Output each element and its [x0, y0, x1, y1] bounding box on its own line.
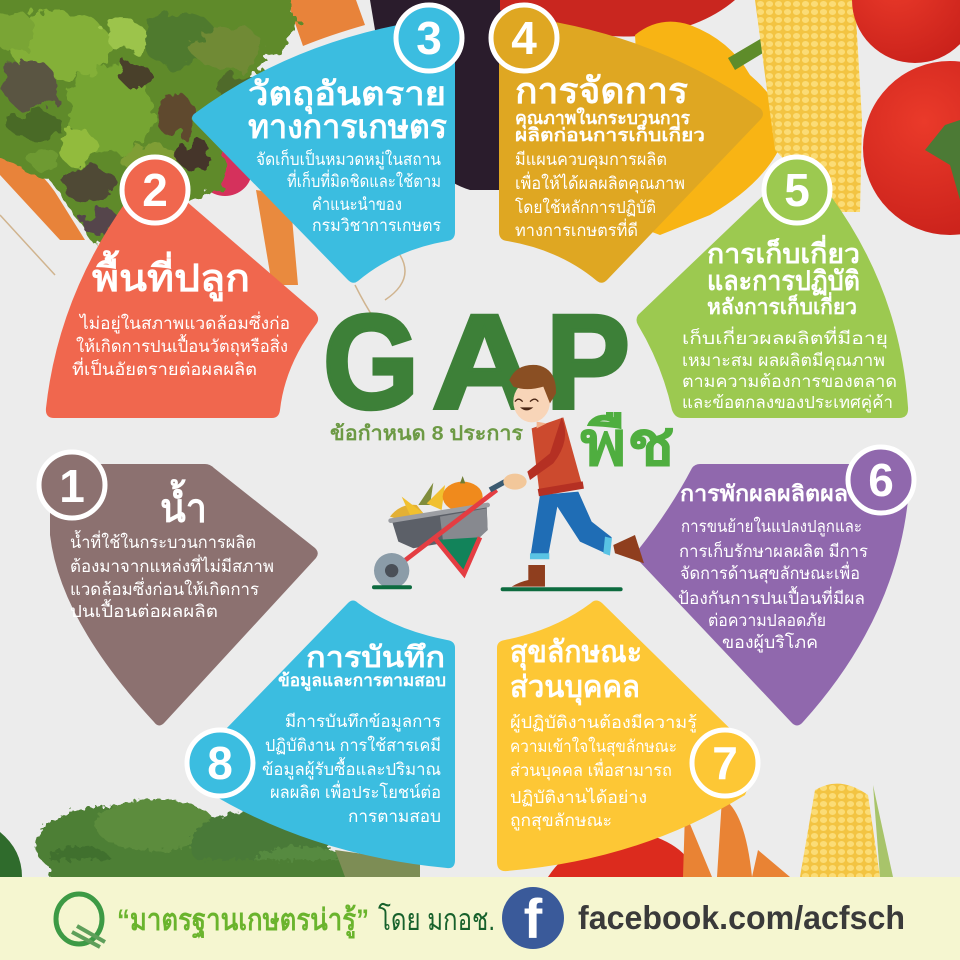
- panel 8 shape: [194, 600, 455, 868]
- number 2: [122, 157, 188, 223]
- panel 4 heading: ผลิตก่อนการเก็บเกี่ยว: [515, 122, 705, 145]
- panel 5 body: เก็บเกี่ยวผลผลิตที่มีอายุ: [682, 326, 888, 349]
- title: GAP: A: [432, 288, 537, 437]
- facebook address: facebook.com/acfsch: [578, 899, 905, 936]
- subtitle: ข้อกำหนด 8 ประการ: [330, 422, 523, 445]
- tomato top: [852, 0, 960, 63]
- radish: [198, 144, 252, 196]
- panel 1 body: น้ำที่ใช้ในกระบวนการผลิต: [70, 530, 256, 552]
- panel 1 body: ปนเปื้อนต่อผลผลิต: [70, 599, 218, 621]
- panel 3: hazardous materials: [192, 5, 462, 283]
- panel 4 heading: คุณภาพในกระบวนการ: [515, 107, 690, 130]
- panel 3 heading: ทางการเกษตร: [248, 108, 447, 145]
- panel 1 body: ต้องมาจากแหล่งที่ไม่มีสภาพ: [70, 554, 274, 576]
- panel 4 heading: การจัดการ: [515, 70, 689, 111]
- panel 3 body: ที่เก็บที่มิดชิดและใช้ตาม: [287, 169, 441, 191]
- carrot roots: [0, 215, 405, 320]
- panel 6 shape: [636, 464, 908, 726]
- cucumber: [0, 832, 22, 877]
- panel 4 shape: [499, 15, 763, 283]
- panel 7 body: ผู้ปฏิบัติงานต้องมีความรู้: [510, 713, 697, 733]
- panel 8 body: การตามสอบ: [348, 807, 441, 826]
- panel 3 body: จัดเก็บเป็นหมวดหมู่ในสถาน: [256, 148, 441, 170]
- carrots bottom: [683, 798, 790, 877]
- panel 4 body: เพื่อให้ได้ผลผลิตคุณภาพ: [515, 171, 685, 194]
- panel 6 body: การเก็บรักษาผลผลิต มีการ: [679, 540, 868, 561]
- number 8: [187, 730, 253, 796]
- panel 8 heading: [278, 642, 446, 692]
- corn leaf: [873, 785, 893, 877]
- number 8: 8: [207, 737, 233, 789]
- panel 6 body: จัดการด้านสุขลักษณะเพื่อ: [680, 561, 860, 584]
- number 1: [39, 452, 105, 518]
- produce: [390, 476, 483, 518]
- panel 5 heading: และการปฏิบัติ: [707, 266, 860, 296]
- broccoli: [35, 799, 350, 890]
- panel 3 heading: [248, 75, 447, 145]
- panel 3 heading: วัตถุอันตราย: [248, 75, 446, 115]
- panel 5 heading: หลังการเก็บเกี่ยว: [707, 291, 857, 319]
- photo: vegetables top: [0, 0, 960, 320]
- panel 8 body: มีการบันทึกข้อมูลการ: [285, 712, 441, 732]
- panel 2 body: ให้เกิดการปนเปื้อนวัตถุหรือสิ่ง: [76, 334, 288, 357]
- asparagus: [335, 850, 420, 877]
- number 7: 7: [712, 737, 738, 789]
- panel 7 body: ส่วนบุคคล เพื่อสามารถ: [510, 758, 672, 781]
- number 5: 5: [784, 164, 810, 216]
- red pepper top: [500, 0, 735, 36]
- number 2: 2: [142, 164, 168, 216]
- lettuce: [0, 0, 295, 245]
- panel 4 heading: [515, 70, 705, 145]
- panel 7 body: ถูกสุขลักษณะ: [510, 811, 612, 831]
- eggplant: [370, 0, 505, 190]
- panel 2 body: ไม่อยู่ในสภาพแวดล้อมซึ่งก่อ: [78, 311, 290, 334]
- carrot left: [0, 148, 85, 240]
- panel 4 body: [515, 150, 685, 240]
- panel 7 body: [510, 713, 697, 831]
- panel 6 body: ของผู้บริโภค: [722, 632, 818, 653]
- panel 5 body: เหมาะสม ผลผลิตมีคุณภาพ: [682, 351, 885, 371]
- footer slogan: โดย มกอช.: [378, 902, 495, 937]
- panel 6: resting produce: [636, 447, 914, 726]
- red pepper bottom: [548, 832, 696, 877]
- panel 8 heading: ข้อมูลและการตามสอบ: [278, 671, 446, 692]
- panel 7 heading: สุขลักษณะ: [510, 636, 642, 671]
- panel 1 body: [70, 530, 274, 621]
- title: GAP: P: [546, 288, 630, 437]
- panel 1 heading: น้ำ: [160, 479, 207, 531]
- title: GAP: G: [323, 288, 419, 437]
- panel 1 body: แวดล้อมซึ่งก่อนให้เกิดการ: [70, 577, 259, 599]
- panel 5 body: ตามความต้องการของตลาด: [682, 372, 897, 391]
- panel 8 heading: การบันทึก: [306, 642, 445, 674]
- panel 6 body: การขนย้ายในแปลงปลูกและ: [681, 516, 862, 537]
- icon: facebook: f: [524, 887, 543, 950]
- corn top: [755, 0, 862, 212]
- logo: [56, 894, 105, 947]
- carrot top: [287, 0, 365, 46]
- number 4: 4: [511, 12, 537, 64]
- panel 6 body: ป้องกันการปนเปื้อนที่มีผล: [678, 586, 865, 608]
- panel 5 body: [682, 326, 897, 413]
- carrot middle: [256, 190, 298, 285]
- panel 2 shape: [46, 170, 318, 418]
- pepper stem: [728, 38, 768, 70]
- panel 4 body: ทางการเกษตรที่ดี: [515, 218, 638, 240]
- panel 3 body: [256, 148, 441, 235]
- icon: facebook: [502, 887, 564, 950]
- panel 5 heading: [707, 234, 860, 319]
- title: GAP: [323, 288, 630, 437]
- number 7: [692, 730, 758, 796]
- panel 3 body: คำแนะนำของ: [312, 195, 402, 214]
- panel 7 body: ความเข้าใจในสุขลักษณะ: [510, 736, 677, 757]
- panel 8 body: ผลผลิต เพื่อประโยชน์ต่อ: [270, 780, 441, 802]
- panel 6 body: ต่อความปลอดภัย: [708, 611, 826, 630]
- panel 1 shape: [50, 464, 318, 726]
- panel 8 body: ปฏิบัติงาน การใช้สารเคมี: [265, 735, 441, 755]
- corn bottom: [800, 784, 880, 877]
- panel 2 heading: พื้นที่ปลูก: [92, 250, 250, 302]
- tomato calyx: [925, 120, 960, 200]
- tomato right: [863, 61, 960, 235]
- footer slogan: “มาตรฐานเกษตรน่ารู้”: [117, 904, 369, 940]
- panel 8 body: ข้อมูลผู้รับซื้อและปริมาณ: [262, 757, 441, 780]
- panel 5 heading: การเก็บเกี่ยว: [707, 234, 860, 269]
- panel 2: planting area: [46, 157, 318, 418]
- footer slogan: [117, 902, 495, 940]
- panel 8 body: [262, 712, 441, 826]
- panel 5: harvest: [636, 157, 908, 418]
- panel 2 body: ที่เป็นอัยตรายต่อผลผลิต: [72, 357, 257, 379]
- number 5: [764, 157, 830, 223]
- panel 3 body: กรมวิชาการเกษตร: [312, 216, 441, 235]
- farmer: [503, 365, 644, 589]
- panel 8: records: [187, 600, 455, 868]
- panel 7 heading: ส่วนบุคคล: [510, 671, 640, 706]
- title: plants: พืช: [580, 410, 675, 479]
- panel 7 shape: [497, 600, 760, 871]
- number 6: 6: [868, 454, 894, 506]
- illustration: farmer with wheelbarrow: [374, 365, 644, 589]
- panel 5 shape: [636, 165, 908, 418]
- panel 1: water: [39, 452, 318, 726]
- panel 6 body: [678, 516, 868, 653]
- panel 7 body: ปฏิบัติงานได้อย่าง: [510, 787, 647, 807]
- panel 4: quality management: [491, 5, 763, 283]
- footer bar: [0, 877, 960, 960]
- panel 3 shape: [192, 17, 455, 283]
- panel 6 heading: การพักผลผลิตผล: [680, 481, 848, 506]
- number 4: [491, 5, 557, 71]
- panel 4 body: มีแผนควบคุมการผลิต: [515, 150, 667, 170]
- panel 2 body: [72, 311, 290, 379]
- number 6: [848, 447, 914, 513]
- number 3: [396, 5, 462, 71]
- panel 7: personal hygiene: [497, 600, 760, 871]
- photo: vegetables bottom: [0, 784, 893, 890]
- yellow pepper: [620, 22, 785, 235]
- panel 5 body: และข้อตกลงของประเทศคู่ค้า: [682, 393, 893, 413]
- number 3: 3: [416, 12, 442, 64]
- panel 7 heading: [510, 636, 642, 706]
- panel 4 body: โดยใช้หลักการปฏิบัติ: [515, 197, 656, 217]
- number 1: 1: [59, 460, 85, 512]
- wheelbarrow: [374, 482, 505, 588]
